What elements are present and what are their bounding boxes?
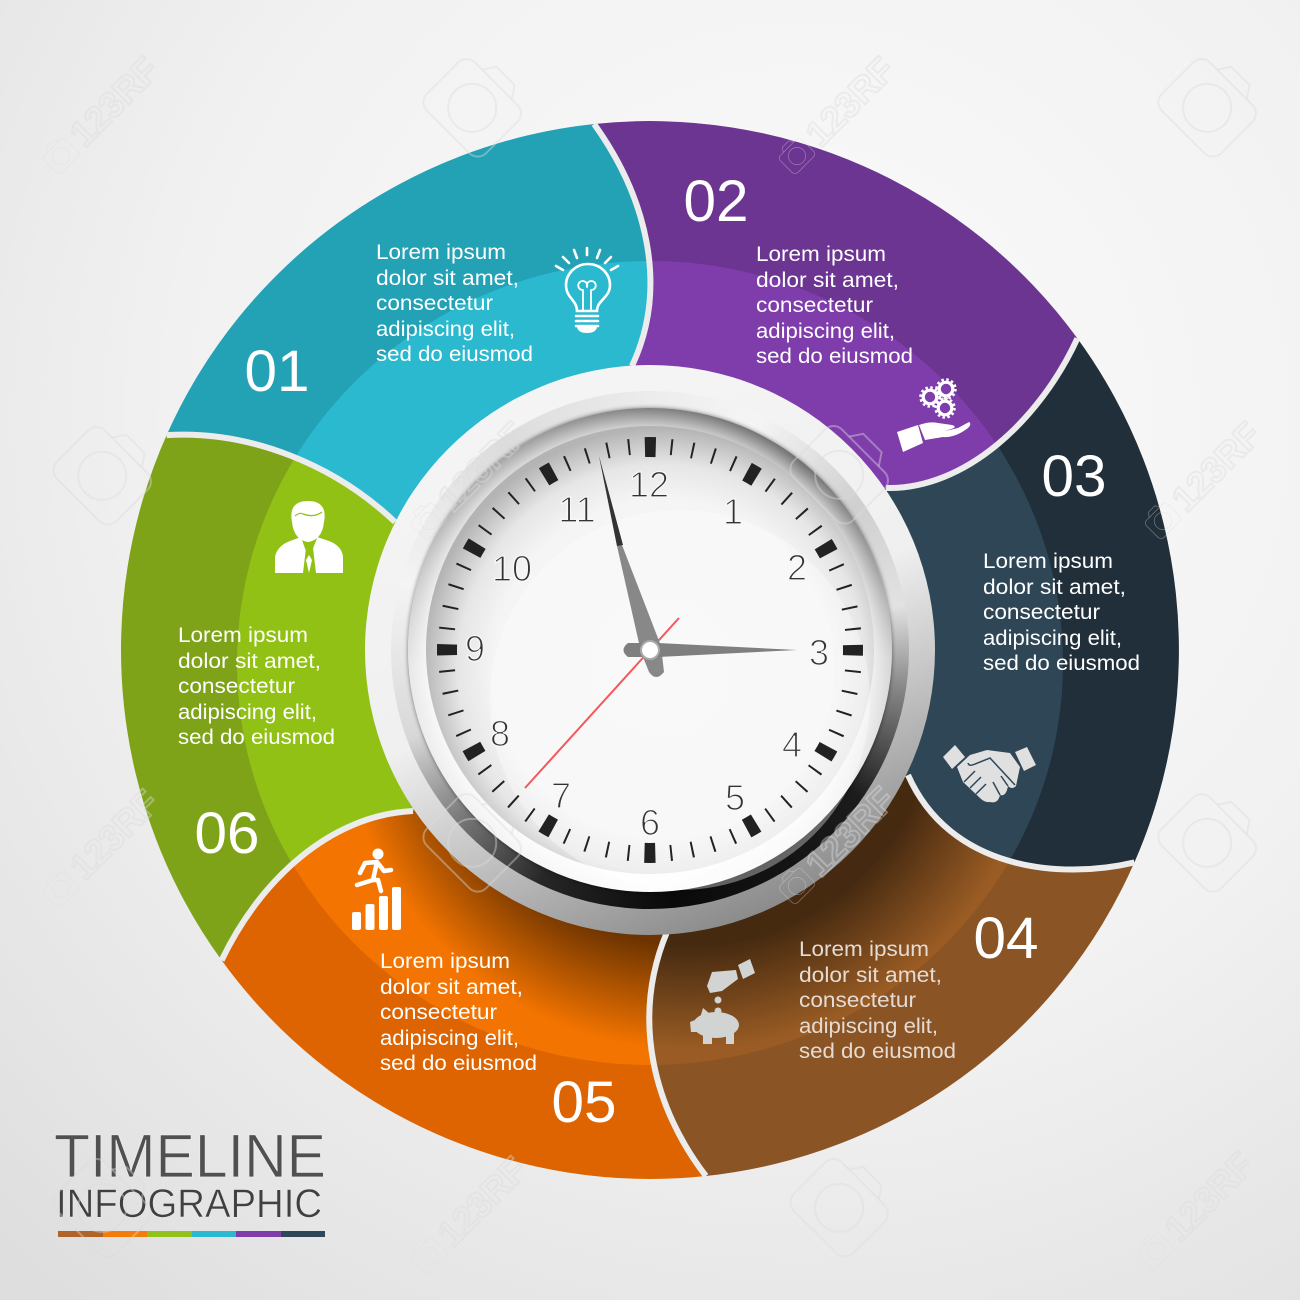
- icon: piggy bank: [690, 959, 755, 1044]
- text block 03: adipiscing elit,: [983, 627, 1122, 650]
- text block 03: dolor sit amet,: [983, 576, 1126, 599]
- watermarks: 123RF: [429, 414, 535, 519]
- watermarks: 123RF: [797, 779, 903, 884]
- numerals: 6: [640, 802, 660, 843]
- text block 02: sed do eiusmod: [756, 345, 913, 368]
- text block 06: sed do eiusmod: [178, 726, 335, 749]
- clock center: [641, 641, 659, 659]
- segment 03 dark slate: [885, 341, 1179, 866]
- numerals: 11: [558, 489, 596, 530]
- hour hand: [624, 643, 797, 657]
- text block 04: [799, 938, 956, 1063]
- icon: runner on bars: [352, 848, 401, 930]
- text block 02: dolor sit amet,: [756, 269, 899, 292]
- numerals: [465, 464, 829, 843]
- minute hand: [599, 456, 664, 677]
- icon: light bulb: [556, 248, 618, 333]
- numbers: 02: [684, 169, 748, 234]
- watermarks: 123RF: [429, 1149, 535, 1254]
- numerals: 5: [725, 777, 745, 818]
- second hand: [525, 618, 679, 788]
- segment 01 teal: [166, 124, 648, 522]
- numerals: 2: [787, 547, 807, 588]
- title colour bar: [58, 1231, 325, 1237]
- numerals: 9: [465, 628, 485, 669]
- numerals: 8: [490, 713, 510, 754]
- watermarks: 123RF: [61, 49, 167, 154]
- text block 06: adipiscing elit,: [178, 701, 317, 724]
- text block 05: [380, 950, 537, 1075]
- text block 01: adipiscing elit,: [376, 318, 515, 341]
- text block 01: consectetur: [376, 292, 493, 315]
- clock outer bezel: [391, 391, 909, 909]
- text block 03: consectetur: [983, 601, 1100, 624]
- segment 06 green: [121, 435, 414, 958]
- text block 01: sed do eiusmod: [376, 343, 533, 366]
- minute ticks: [446, 446, 854, 854]
- text block 05: Lorem ipsum: [380, 950, 510, 973]
- text block 05: adipiscing elit,: [380, 1027, 519, 1050]
- icon: gears and hand: [897, 380, 970, 452]
- title: [54, 1122, 326, 1237]
- watermarks: 123RF: [61, 782, 167, 887]
- title: infographic: INFOGRAPHIC: [56, 1182, 322, 1226]
- segment 05 orange: [222, 810, 702, 1179]
- numerals: 12: [629, 464, 669, 505]
- watermarks: 123RF: [797, 49, 903, 154]
- clock drop shadow on segments: [652, 774, 990, 1040]
- watermarks: 123RF: [1156, 1144, 1262, 1249]
- text block 04: sed do eiusmod: [799, 1040, 956, 1063]
- text block 05: dolor sit amet,: [380, 976, 523, 999]
- title: timeline: TIMELINE: [54, 1122, 326, 1190]
- numbers: 05: [552, 1070, 616, 1135]
- numerals: 3: [809, 632, 829, 673]
- text block 04: adipiscing elit,: [799, 1015, 938, 1038]
- numerals: 4: [782, 724, 802, 765]
- dial highlight: [490, 510, 870, 890]
- text block 06: dolor sit amet,: [178, 650, 321, 673]
- icon: businessman: [275, 501, 343, 573]
- text block 05: sed do eiusmod: [380, 1052, 537, 1075]
- text block 01: [376, 241, 533, 366]
- text block 04: Lorem ipsum: [799, 938, 929, 961]
- text block 02: [756, 243, 913, 368]
- text block 06: Lorem ipsum: [178, 624, 308, 647]
- segment 04 brown: [652, 774, 1133, 1176]
- text block 02: adipiscing elit,: [756, 320, 895, 343]
- clock inner bezel: [408, 408, 892, 892]
- text block 06: [178, 624, 335, 749]
- text block 01: dolor sit amet,: [376, 267, 519, 290]
- numbers: 04: [974, 906, 1038, 971]
- numbers: 06: [194, 801, 260, 866]
- numerals: 7: [551, 775, 571, 816]
- clock: [365, 365, 935, 935]
- text block 03: [983, 550, 1140, 675]
- hour ticks: [447, 447, 853, 853]
- watermarks: 123RF: [1163, 414, 1269, 519]
- segment 02 purple: [598, 121, 1078, 489]
- text block 02: Lorem ipsum: [756, 243, 886, 266]
- dial: [426, 426, 874, 874]
- numerals: 1: [723, 491, 743, 532]
- numerals: 10: [492, 548, 532, 589]
- text block 02: consectetur: [756, 294, 873, 317]
- text block 01: Lorem ipsum: [376, 241, 506, 264]
- numbers: [194, 169, 1106, 1135]
- numbers: 01: [244, 339, 310, 404]
- text block 04: dolor sit amet,: [799, 964, 942, 987]
- text block 03: Lorem ipsum: [983, 550, 1113, 573]
- text block 03: sed do eiusmod: [983, 652, 1140, 675]
- icon: handshake: [943, 745, 1036, 802]
- numbers: 03: [1042, 444, 1106, 509]
- text block 06: consectetur: [178, 675, 295, 698]
- text block 04: consectetur: [799, 989, 916, 1012]
- text block 05: consectetur: [380, 1001, 497, 1024]
